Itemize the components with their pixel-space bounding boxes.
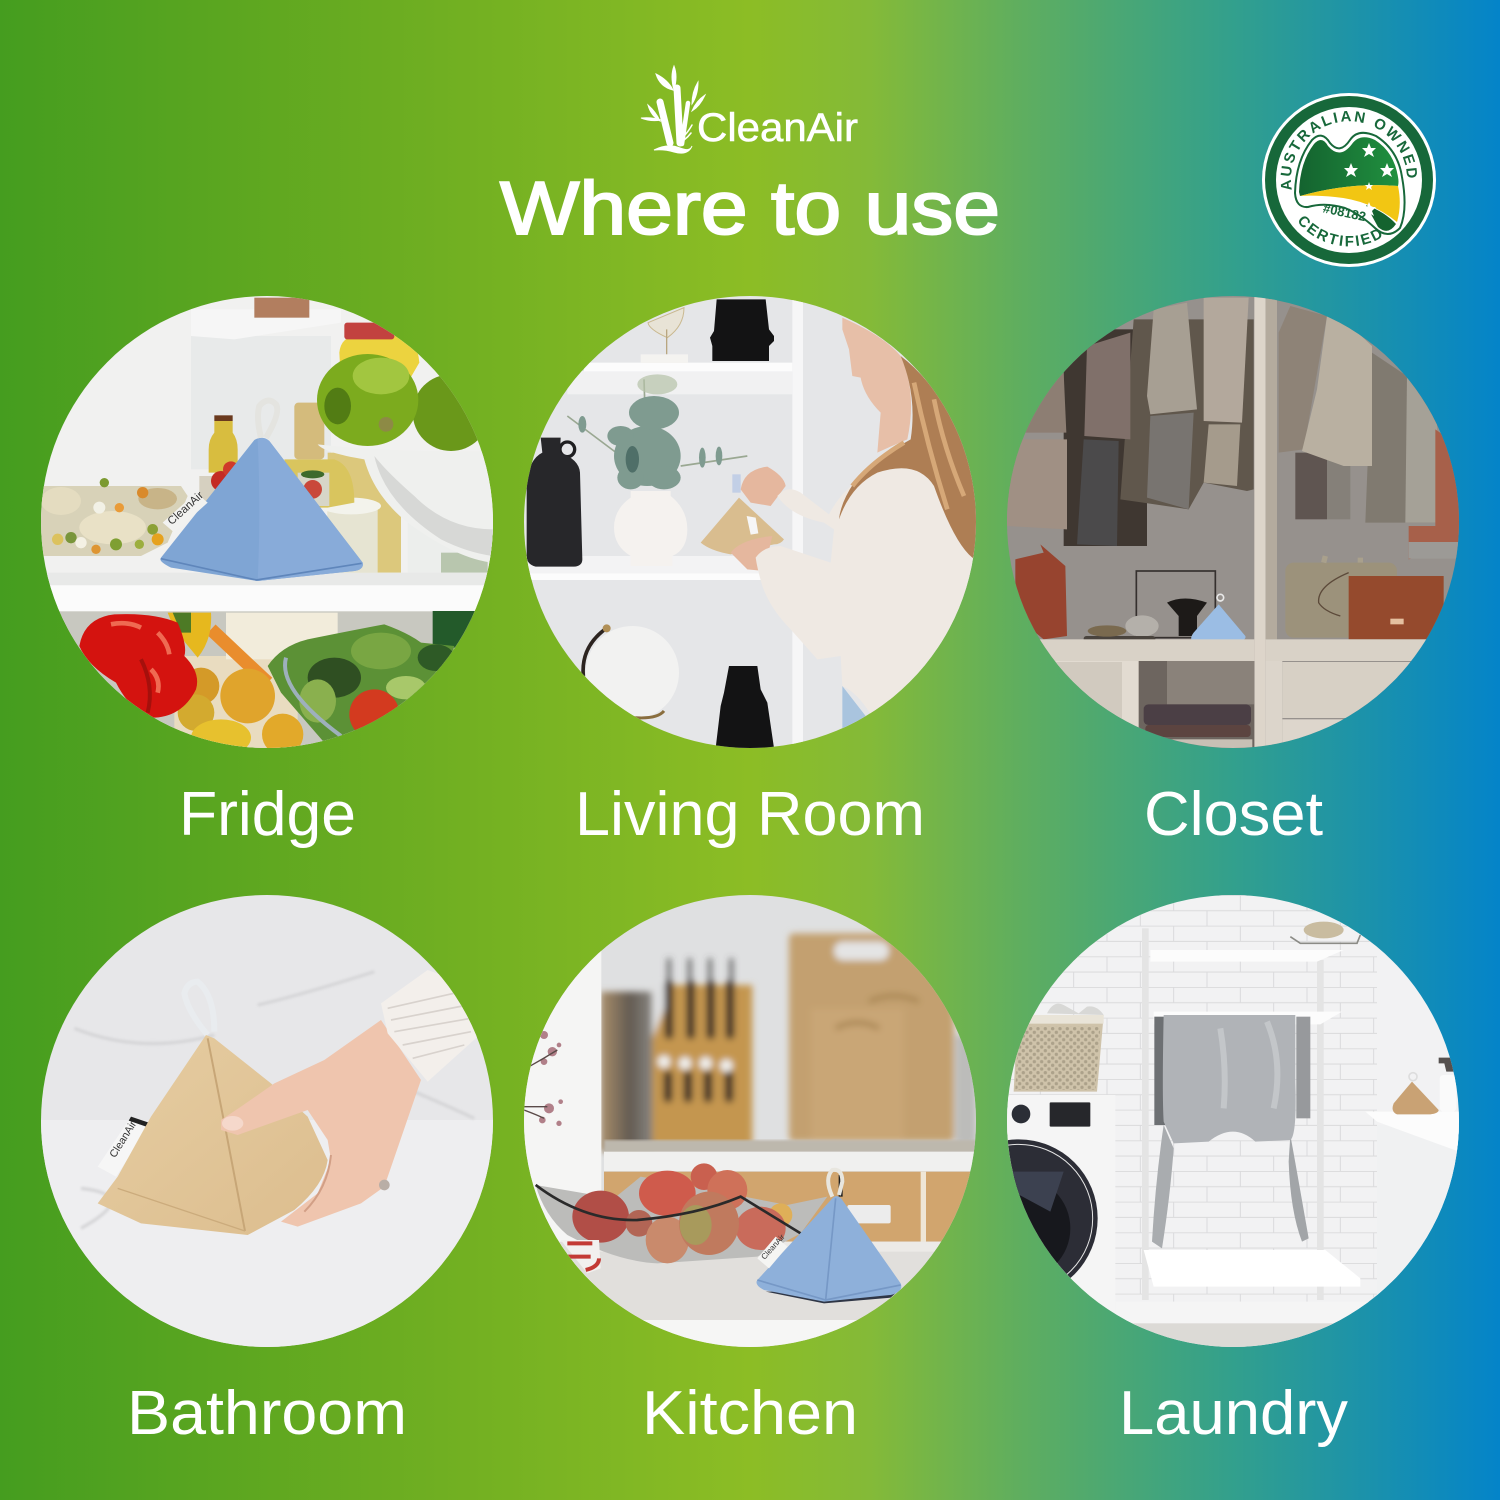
badge map [1295, 133, 1405, 234]
label: Bathroom: Bathroom [127, 1379, 407, 1448]
wordmark: CleanAir [697, 106, 858, 150]
right hanging clothes [1279, 306, 1459, 559]
logo: CleanAir [641, 66, 858, 153]
red toiletry bag [1015, 544, 1067, 639]
panel: laundry [940, 895, 1459, 1347]
white vase [614, 491, 688, 556]
label: Laundry: Laundry [1119, 1379, 1348, 1448]
tag: CleanAir [107, 1119, 139, 1160]
panel: kitchen [524, 895, 976, 1347]
left hanging clothes [1007, 298, 1254, 546]
branches [524, 950, 601, 1347]
tag [98, 1117, 151, 1177]
vegetable dish [41, 478, 188, 556]
knit cuff [381, 970, 478, 1082]
blue bag [756, 1170, 901, 1303]
square frame and objects [1084, 571, 1215, 643]
marble counter [41, 1120, 493, 1347]
label: Living Room: Living Room [575, 780, 925, 849]
green apples [317, 354, 489, 451]
folded clothes [1144, 704, 1252, 748]
black cone vase [716, 666, 774, 748]
spray bottle [1439, 1058, 1456, 1112]
plant [567, 374, 747, 489]
globe [583, 624, 679, 719]
baseboard and floor [1115, 1302, 1382, 1347]
blue bag: CleanAir [166, 489, 206, 528]
shelf and cabinets [1040, 639, 1426, 748]
black jug [527, 438, 582, 567]
salad bowl [268, 611, 476, 748]
blue bag [160, 401, 363, 581]
tan bag [98, 1035, 328, 1235]
tan bag [701, 474, 784, 554]
peppers [79, 613, 211, 718]
striped napkin [561, 1240, 601, 1273]
apples [572, 1163, 792, 1263]
sweater [756, 466, 976, 714]
face [842, 318, 911, 453]
produce below shelf [174, 613, 338, 756]
hair [839, 356, 976, 559]
wood pillar [1254, 296, 1277, 748]
washing machine [940, 1095, 1115, 1347]
blue bag: CleanAir [759, 1232, 787, 1261]
tan bag [1393, 1073, 1439, 1114]
glass bowl [536, 1177, 827, 1263]
rack [1142, 928, 1360, 1300]
panel: fridge [41, 296, 493, 756]
badge bottom text: CERTIFIED [1299, 216, 1382, 246]
decorative leaf [641, 308, 688, 363]
panel: living room [524, 296, 976, 748]
title: Where to use [500, 166, 1000, 250]
items on top shelf [1290, 922, 1360, 943]
brick wall [1007, 895, 1377, 1302]
label: Closet: Closet [1144, 780, 1323, 849]
jars and bottles [209, 323, 419, 473]
label: Fridge: Fridge [179, 780, 356, 849]
blue bag [1191, 594, 1246, 642]
cheese [284, 459, 354, 508]
badge top text: AUSTRALIAN OWNED [1280, 111, 1417, 190]
badge: Australian Owned Certified [1262, 93, 1436, 267]
black stack vase top [710, 299, 774, 361]
counter and cabinets [524, 1140, 976, 1347]
jeans [842, 686, 866, 733]
loop [184, 982, 214, 1035]
white bowl [318, 444, 493, 563]
grey sweater [1152, 1015, 1310, 1248]
bowl rim [536, 1185, 801, 1233]
basket [1014, 1004, 1104, 1092]
fridge interior [191, 298, 493, 573]
badge number: #08182 [1322, 201, 1367, 224]
panel: bathroom [41, 895, 493, 1347]
panel: closet [1007, 296, 1459, 748]
shelf [41, 573, 493, 748]
blurred background [601, 933, 976, 1152]
salad glasses [199, 461, 329, 506]
handbags [1285, 556, 1444, 639]
icon: bamboo [641, 66, 705, 153]
hand [221, 1020, 421, 1227]
hands [731, 467, 786, 571]
shelves [524, 363, 792, 580]
side cabinet [1365, 1112, 1459, 1347]
label: Kitchen: Kitchen [642, 1379, 858, 1448]
